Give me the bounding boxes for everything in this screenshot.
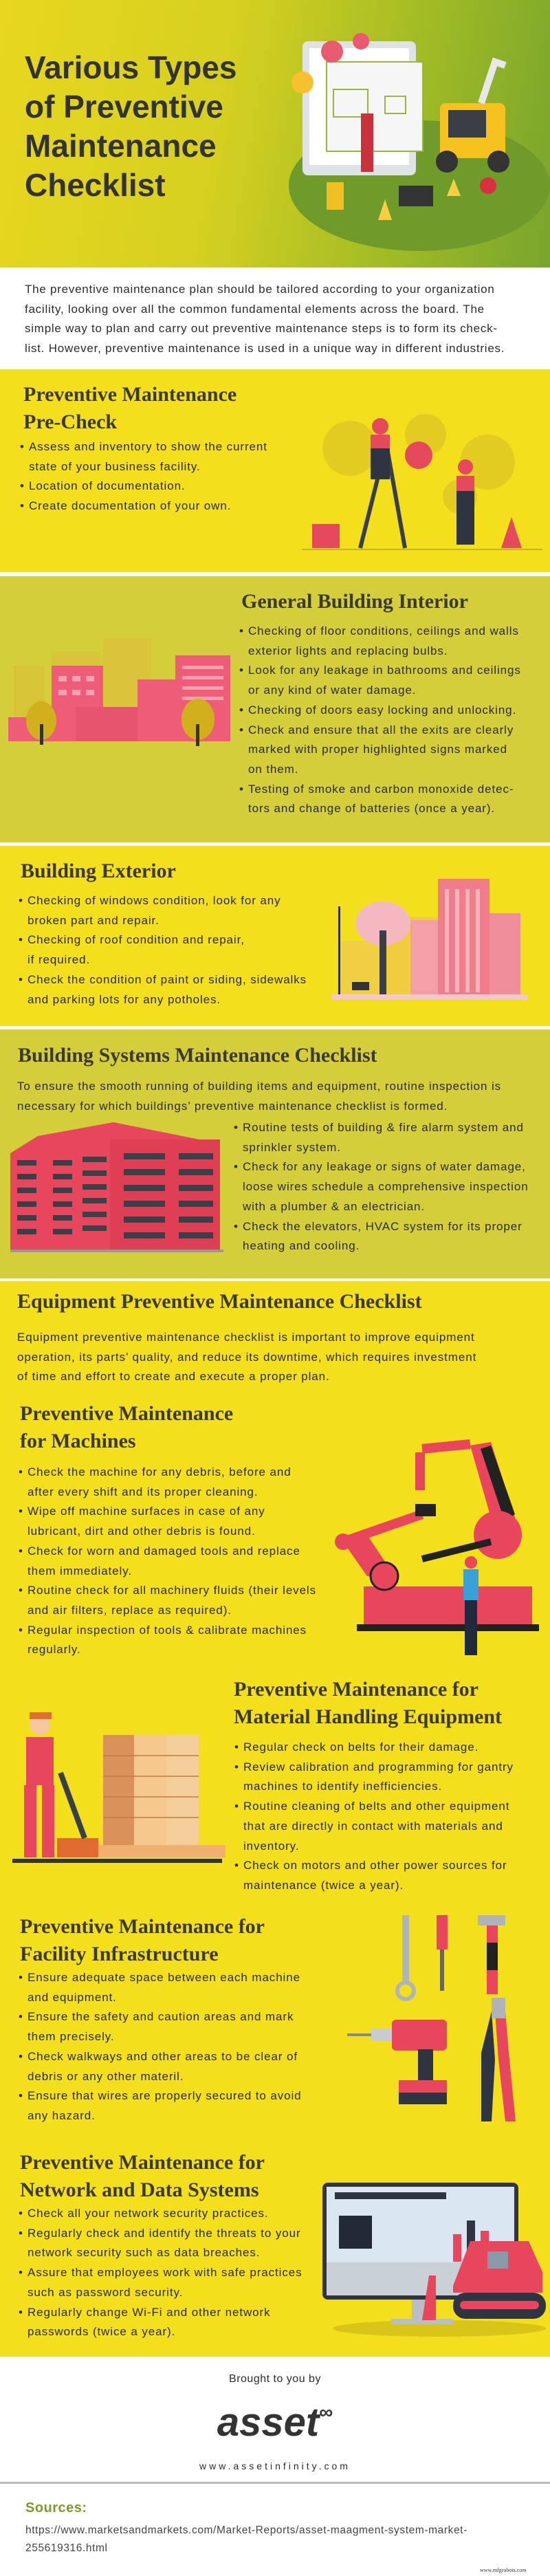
- bullets: material handling: inventory.: [243, 1840, 299, 1853]
- paragraph: equipment: [17, 1331, 476, 1383]
- panel: equipment: [0, 1281, 550, 2357]
- bullets: material handling: that are directly in contact with materials and: [243, 1820, 503, 1833]
- bullets: material handling: [235, 1740, 514, 1892]
- bullets: facility: and equipment.: [28, 1991, 117, 2004]
- illustration: robot arm: [335, 1439, 539, 1655]
- bullets: network: Regularly change Wi-Fi and other network: [28, 2306, 270, 2319]
- illustration: city street: [331, 879, 527, 1000]
- bullets: material handling: machines to identify inefficiencies.: [243, 1780, 442, 1793]
- bullets: network: [19, 2207, 302, 2338]
- bullets: interior: exterior lights and replacing bulbs.: [248, 644, 448, 657]
- hero banner: [0, 0, 550, 268]
- heading: machines: [20, 1402, 233, 1452]
- bullets: machines: [19, 1465, 316, 1656]
- intro paragraph: list. However, preventive maintenance is used in a unique way in different industries.: [25, 342, 505, 355]
- heading: facility infrastructure: Facility Infrastructure: [20, 1943, 219, 1965]
- bullets: building systems: Check for any leakage or signs of water damage,: [243, 1160, 526, 1173]
- paragraph: building systems: necessary for which buildings’ preventive maintenance checklist is formed.: [17, 1100, 448, 1113]
- bullets: network: passwords (twice a year).: [28, 2325, 175, 2338]
- bullets: interior: Look for any leakage in bathrooms and ceilings: [248, 664, 521, 677]
- heading: machines: for Machines: [20, 1430, 136, 1452]
- bullets: interior: or any kind of water damage.: [248, 684, 416, 697]
- heading: facility infrastructure: [20, 1915, 265, 1965]
- bullets: interior: Testing of smoke and carbon monoxide detec-: [248, 783, 514, 796]
- bullets: building systems: heating and cooling.: [243, 1239, 360, 1252]
- heading: building systems: Building Systems Maintenance Checklist: [18, 1044, 377, 1067]
- panel: building exterior: [0, 846, 550, 1026]
- bullets: machines: regularly.: [28, 1643, 81, 1656]
- heading: network and data systems: Preventive Maintenance for: [20, 2151, 265, 2174]
- bullets: exterior: Checking of roof condition and repair,: [28, 933, 245, 946]
- bullets: network: Check all your network security practices.: [28, 2207, 269, 2220]
- illustration: tools: [347, 1915, 516, 2121]
- illustration: workers on ladder: [302, 414, 542, 550]
- source url: https://www.marketsandmarkets.com/Market-Reports/asset-maagment-system-market-: [25, 2524, 468, 2536]
- source url: [25, 2524, 468, 2554]
- heading: network and data systems: Network and Data Systems: [20, 2179, 258, 2201]
- footer url: www.assetinfinity.com: [199, 2460, 351, 2471]
- heading: machines: Preventive Maintenance: [20, 1402, 233, 1425]
- illustration: red office building: [10, 1122, 223, 1252]
- bullets: material handling: Regular check on belts for their damage.: [243, 1740, 478, 1754]
- bullets: machines: Check for worn and damaged tools and replace: [28, 1544, 300, 1558]
- panel: general building interior: [0, 576, 550, 842]
- bullets: building systems: [234, 1121, 529, 1252]
- bullets: machines: Check the machine for any debris, before and: [28, 1465, 292, 1478]
- heading: facility infrastructure: Preventive Maintenance for: [20, 1915, 265, 1938]
- hero title: of Preventive: [25, 89, 223, 124]
- bullets: exterior: [19, 894, 307, 1006]
- bullets: material handling: maintenance (twice a year).: [243, 1879, 404, 1892]
- bullets: pre-check: Location of documentation.: [29, 479, 186, 492]
- bullets: facility: Ensure the safety and caution areas and mark: [28, 2010, 294, 2023]
- bullets: machines: and air filters, replace as required).: [28, 1604, 232, 1617]
- bullets: exterior: Checking of windows condition, look for any: [28, 894, 280, 907]
- paragraph: equipment: operation, its parts’ quality, and reduce its downtime, which requires investment: [17, 1351, 476, 1364]
- logo: asset infinity: asset∞: [217, 2400, 333, 2445]
- bullets: facility: them precisely.: [28, 2030, 115, 2043]
- bullets: interior: Check and ensure that all the exits are clearly: [248, 723, 514, 736]
- bullets: exterior: Check the condition of paint or siding, sidewalks: [28, 973, 307, 986]
- footer: brought to you by: Brought to you by: [229, 2373, 321, 2385]
- intro paragraph: [25, 283, 505, 355]
- bullets: interior: marked with proper highlighted signs marked: [248, 743, 507, 756]
- bullets: pre-check: [21, 440, 267, 512]
- bullets: machines: Wipe off machine surfaces in case of any: [28, 1505, 265, 1518]
- bullets: interior: Checking of doors easy locking and unlocking.: [248, 703, 516, 717]
- bullets: exterior: and parking lots for any potholes.: [28, 993, 221, 1006]
- heading: network and data systems: [20, 2151, 265, 2201]
- illustration: worker with pallet jack: [12, 1712, 226, 1863]
- bullets: building systems: Routine tests of building & fire alarm system and: [243, 1121, 524, 1134]
- bullets: interior: on them.: [248, 763, 298, 776]
- bullets: building systems: sprinkler system.: [243, 1141, 341, 1154]
- bullets: building systems: loose wires schedule a comprehensive inspection: [243, 1180, 529, 1193]
- heading: equipment: Equipment Preventive Maintenance Checklist: [17, 1290, 422, 1313]
- bullets: interior: [239, 624, 521, 815]
- bullets: pre-check: state of your business facility.: [29, 460, 201, 473]
- bullets: network: Regularly check and identify the threats to your: [28, 2227, 301, 2240]
- heading: general building interior: General Building Interior: [241, 590, 468, 613]
- bullets: facility: Check walkways and other areas to be clear of: [28, 2050, 298, 2063]
- bullets: exterior: broken part and repair.: [28, 914, 160, 927]
- paragraph: equipment: Equipment preventive maintenance checklist is important to improve equipment: [17, 1331, 475, 1344]
- bullets: machines: Regular inspection of tools & calibrate machines: [28, 1624, 307, 1637]
- bullets: interior: Checking of floor conditions, ceilings and walls: [248, 624, 519, 637]
- bullets: network: such as password security.: [28, 2286, 183, 2299]
- bullets: network: network security such as data breaches.: [28, 2246, 260, 2259]
- intro paragraph: simple way to plan and carry out preventive maintenance steps is to form its check-: [25, 322, 498, 335]
- bullets: interior: tors and change of batteries (once a year).: [248, 802, 495, 815]
- bullets: material handling: Check on motors and other power sources for: [243, 1859, 507, 1872]
- bullets: machines: after every shift and its proper cleaning.: [28, 1485, 258, 1498]
- heading: pre-check: [23, 383, 236, 433]
- panel: building systems: [0, 1029, 550, 1278]
- hero title: Maintenance: [25, 128, 217, 164]
- heading: pre-check: Pre-Check: [23, 411, 117, 433]
- heading: pre-check: Preventive Maintenance: [23, 383, 236, 406]
- bullets: facility: [19, 1971, 302, 2122]
- paragraph: building systems: To ensure the smooth running of building items and equipment, routine inspection is: [17, 1080, 501, 1093]
- illustration: pink buildings: [8, 638, 230, 746]
- bullets: material handling: Review calibration and programming for gantry: [243, 1760, 514, 1773]
- heading: material handling: [234, 1678, 502, 1728]
- bullets: pre-check: Assess and inventory to show the current: [29, 440, 267, 453]
- panel: pre-check: [0, 369, 550, 572]
- intro paragraph: The preventive maintenance plan should be tailored according to your organization: [25, 283, 495, 296]
- bullets: facility: Ensure that wires are properly secured to avoid: [28, 2089, 302, 2102]
- hero illustration: [289, 33, 550, 251]
- bullets: machines: them immediately.: [28, 1564, 132, 1578]
- heading: material handling: Preventive Maintenance for: [234, 1678, 478, 1701]
- bullets: facility: debris or any other materil.: [28, 2070, 184, 2083]
- intro paragraph: facility, looking over all the common fundamental elements across the board. The: [25, 303, 485, 316]
- bullets: machines: Routine check for all machinery fluids (their levels: [28, 1584, 316, 1597]
- illustration: monitor and bulldozer: [322, 2183, 546, 2337]
- bullets: exterior: if required.: [28, 953, 90, 966]
- bullets: network: Assure that employees work with safe practices: [28, 2266, 302, 2279]
- hero title: Checklist: [25, 167, 166, 203]
- hero title: [25, 50, 237, 203]
- heading: building exterior: Building Exterior: [21, 860, 176, 882]
- sources: Sources:: [25, 2500, 87, 2515]
- source url: 255619316.html: [25, 2542, 108, 2554]
- bullets: facility: any hazard.: [28, 2109, 96, 2122]
- bullets: pre-check: Create documentation of your own.: [29, 499, 231, 512]
- bullets: material handling: Routine cleaning of belts and other equipment: [243, 1800, 509, 1813]
- bullets: building systems: Check the elevators, HVAC system for its proper: [243, 1220, 522, 1233]
- paragraph: equipment: of time and effort to create and execute a proper plan.: [17, 1370, 330, 1383]
- bullets: building systems: with a plumber & an electrician.: [243, 1200, 425, 1213]
- hero title: Various Types: [25, 50, 237, 85]
- heading: material handling: Material Handling Equipment: [234, 1705, 502, 1728]
- bullets: machines: lubricant, dirt and other debris is found.: [28, 1525, 256, 1538]
- bullets: facility: Ensure adequate space between each machine: [28, 1971, 300, 1984]
- paragraph: building systems: [17, 1080, 501, 1113]
- watermark: www.mfgrobots.com: [480, 2567, 526, 2573]
